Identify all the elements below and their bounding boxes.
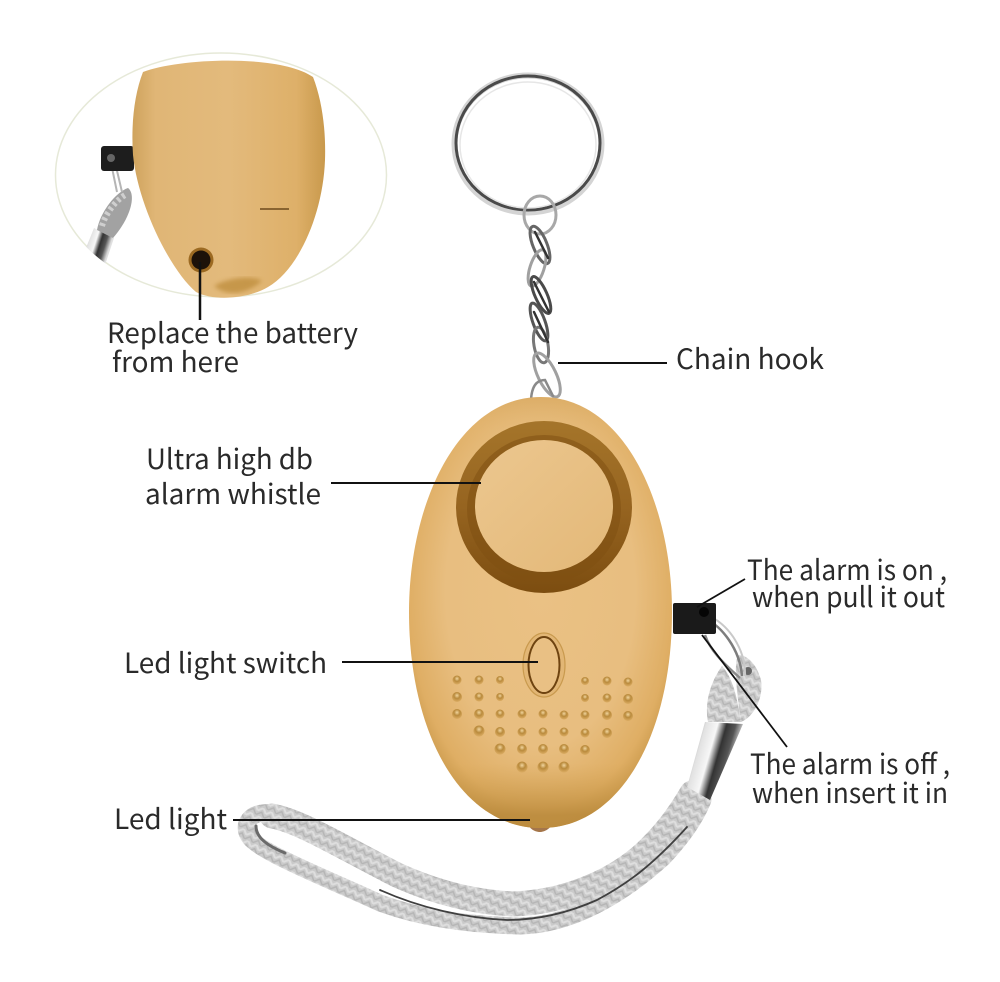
key ring <box>454 76 602 212</box>
jump ring <box>524 196 556 234</box>
label: alarm on: The alarm is on , <box>747 549 947 589</box>
leader line: alarm off <box>702 635 787 747</box>
twisted links <box>526 224 554 266</box>
dark gap between strands <box>380 827 687 920</box>
inset outline ellipse <box>56 53 386 297</box>
inset: small slot mark <box>260 208 289 210</box>
label: chain hook: Chain hook <box>676 338 825 378</box>
egg-shaped gold shell <box>409 397 672 828</box>
inset: black switch pin <box>101 146 134 171</box>
label: ultra high db alarm whistle: Ultra high db <box>146 438 313 478</box>
label: replace the battery: Replace the battery <box>107 312 358 352</box>
wrist strap <box>246 793 703 926</box>
label: ultra high db alarm whistle <box>145 438 321 513</box>
inset: gold alarm back <box>132 61 325 298</box>
lower strand <box>246 800 703 926</box>
led switch recess <box>523 633 565 697</box>
dark link shadows <box>534 232 549 342</box>
label: alarm on: when pull it out <box>752 576 945 616</box>
label: alarm off <box>750 743 950 812</box>
led switch button <box>528 637 560 693</box>
label: alarm on <box>747 549 947 616</box>
label: alarm off: The alarm is off , <box>750 743 950 783</box>
leader line: alarm whistle <box>331 482 481 484</box>
leader line: battery <box>199 262 201 320</box>
whistle ring inner shadow <box>467 435 621 583</box>
inset: bottom shading <box>214 278 262 293</box>
label: ultra high db alarm whistle: alarm whistle <box>145 473 321 513</box>
whistle ring <box>456 421 632 593</box>
black switch pin <box>673 603 716 634</box>
inset: battery screw hole <box>188 248 214 272</box>
leader line: led light <box>233 819 530 821</box>
whistle disc <box>475 440 613 572</box>
alarm body <box>409 397 672 832</box>
label: led light switch: Led light switch <box>124 642 327 682</box>
strap top loop <box>707 655 761 722</box>
label: replace the battery: from here <box>112 341 239 381</box>
inset: battery replacement close-up <box>56 53 386 298</box>
chain hook <box>528 349 566 401</box>
chain with hook <box>524 196 566 401</box>
label: replace the battery <box>107 312 358 381</box>
leader line: alarm on <box>697 579 745 607</box>
split ring on switch pin <box>703 615 745 678</box>
leader line: chain hook <box>558 362 667 364</box>
upper strand <box>272 793 692 904</box>
inset: rope and ferrule <box>86 171 132 263</box>
leader line: led switch <box>342 661 538 663</box>
strap ferrule <box>687 722 743 800</box>
label: led light: Led light <box>114 798 227 838</box>
label: alarm off: when insert it in <box>752 772 948 812</box>
speaker dots <box>452 676 633 772</box>
inner loop shadow <box>256 826 285 853</box>
led light <box>526 819 554 832</box>
